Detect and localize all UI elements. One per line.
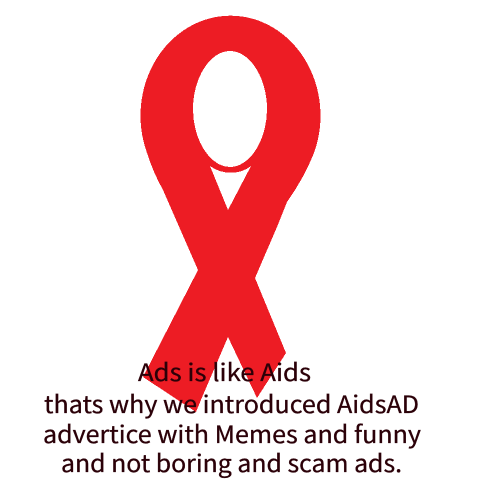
caption text: Ads is like Aids (138, 353, 311, 388)
caption text: thats why we introduced AidsAD (44, 385, 419, 420)
caption text: advertice with Memes and funny (43, 415, 422, 450)
icon: red awareness ribbon (141, 16, 320, 412)
caption text: and not boring and scam ads. (61, 444, 402, 479)
caption text (43, 353, 422, 479)
